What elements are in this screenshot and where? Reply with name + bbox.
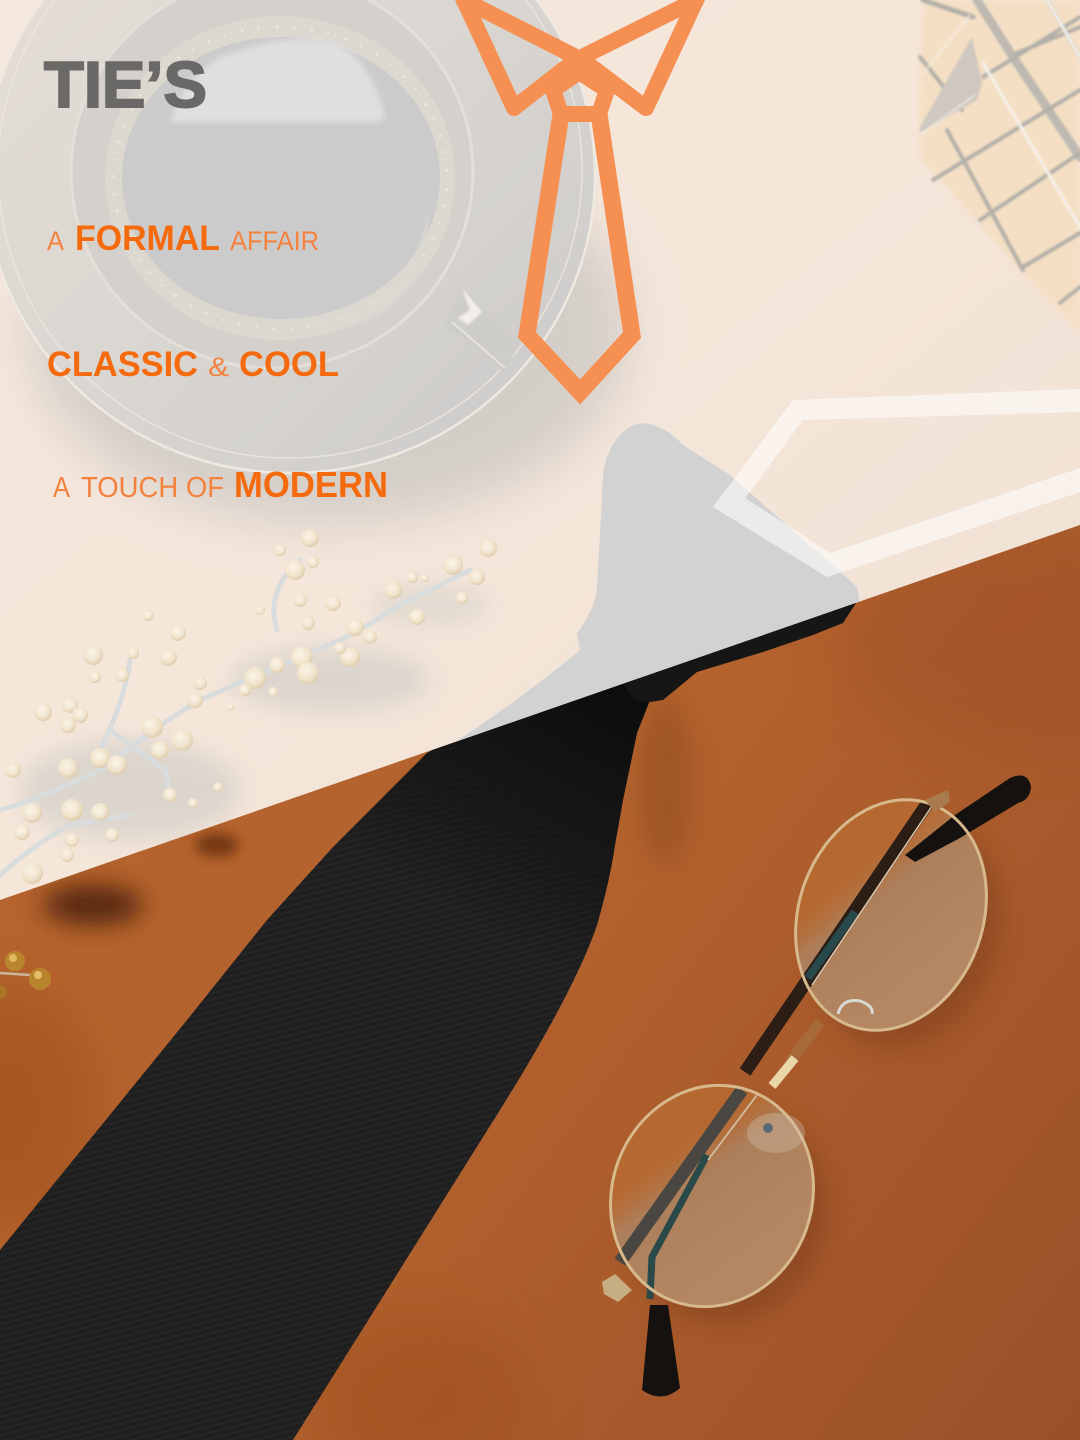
title: TIE’S <box>44 48 207 121</box>
text line: a touch of modern <box>53 464 388 505</box>
icon: gold berries <box>0 951 51 999</box>
glasses <box>580 773 1032 1397</box>
nose pads <box>838 1001 872 1014</box>
coffee saucer shadow <box>14 214 646 542</box>
text line: classic and cool: CLASSIC <box>47 345 198 384</box>
coffee lower reflection <box>318 224 427 325</box>
text line: a formal affair: A <box>47 226 64 256</box>
black tie <box>0 600 858 1440</box>
text line: a touch of modern: MODERN <box>234 464 388 505</box>
glasses shadows <box>826 836 1005 1052</box>
plaid cloth <box>919 0 1080 333</box>
upper overlay panel <box>0 0 1080 900</box>
tie knot strip <box>620 600 858 702</box>
text line: classic and cool <box>47 345 339 384</box>
tie knot under panel <box>443 423 860 750</box>
text line: classic and cool: & <box>208 352 229 382</box>
berry branch <box>0 529 497 884</box>
lens rims <box>794 798 988 1032</box>
hinges <box>925 790 950 812</box>
text line: classic and cool: COOL <box>239 345 339 384</box>
text line: a formal affair: FORMAL <box>75 219 220 258</box>
black temple tip, lower <box>642 1305 680 1397</box>
cup handle <box>452 290 516 370</box>
tie contact shadow <box>637 695 693 865</box>
coffee saucer <box>0 0 595 473</box>
text line: a touch of modern: TOUCH OF <box>81 472 224 504</box>
text line: a touch of modern: A <box>53 472 71 504</box>
coffee crema <box>105 16 455 340</box>
coffee cup <box>71 0 473 368</box>
arm across lower lens <box>620 1090 742 1262</box>
orange tie outline icon <box>460 0 700 392</box>
white tie outline <box>713 389 1080 577</box>
lower photo: table objects <box>0 530 1080 1440</box>
text line: a formal affair <box>47 219 319 258</box>
crema speckles <box>113 27 447 329</box>
folded arm, upper and middle <box>745 804 927 1072</box>
upper lens fill <box>798 802 946 932</box>
surface shading <box>0 530 1080 1440</box>
text line: a formal affair: AFFAIR <box>230 226 319 256</box>
coffee highlight <box>170 39 385 122</box>
coffee surface <box>122 37 440 319</box>
shadows of berries <box>43 833 239 925</box>
lower lens fill <box>612 1087 770 1212</box>
black temple tip, upper <box>905 775 1031 862</box>
berry shadows <box>230 648 430 712</box>
saucer inner ring <box>0 0 582 458</box>
